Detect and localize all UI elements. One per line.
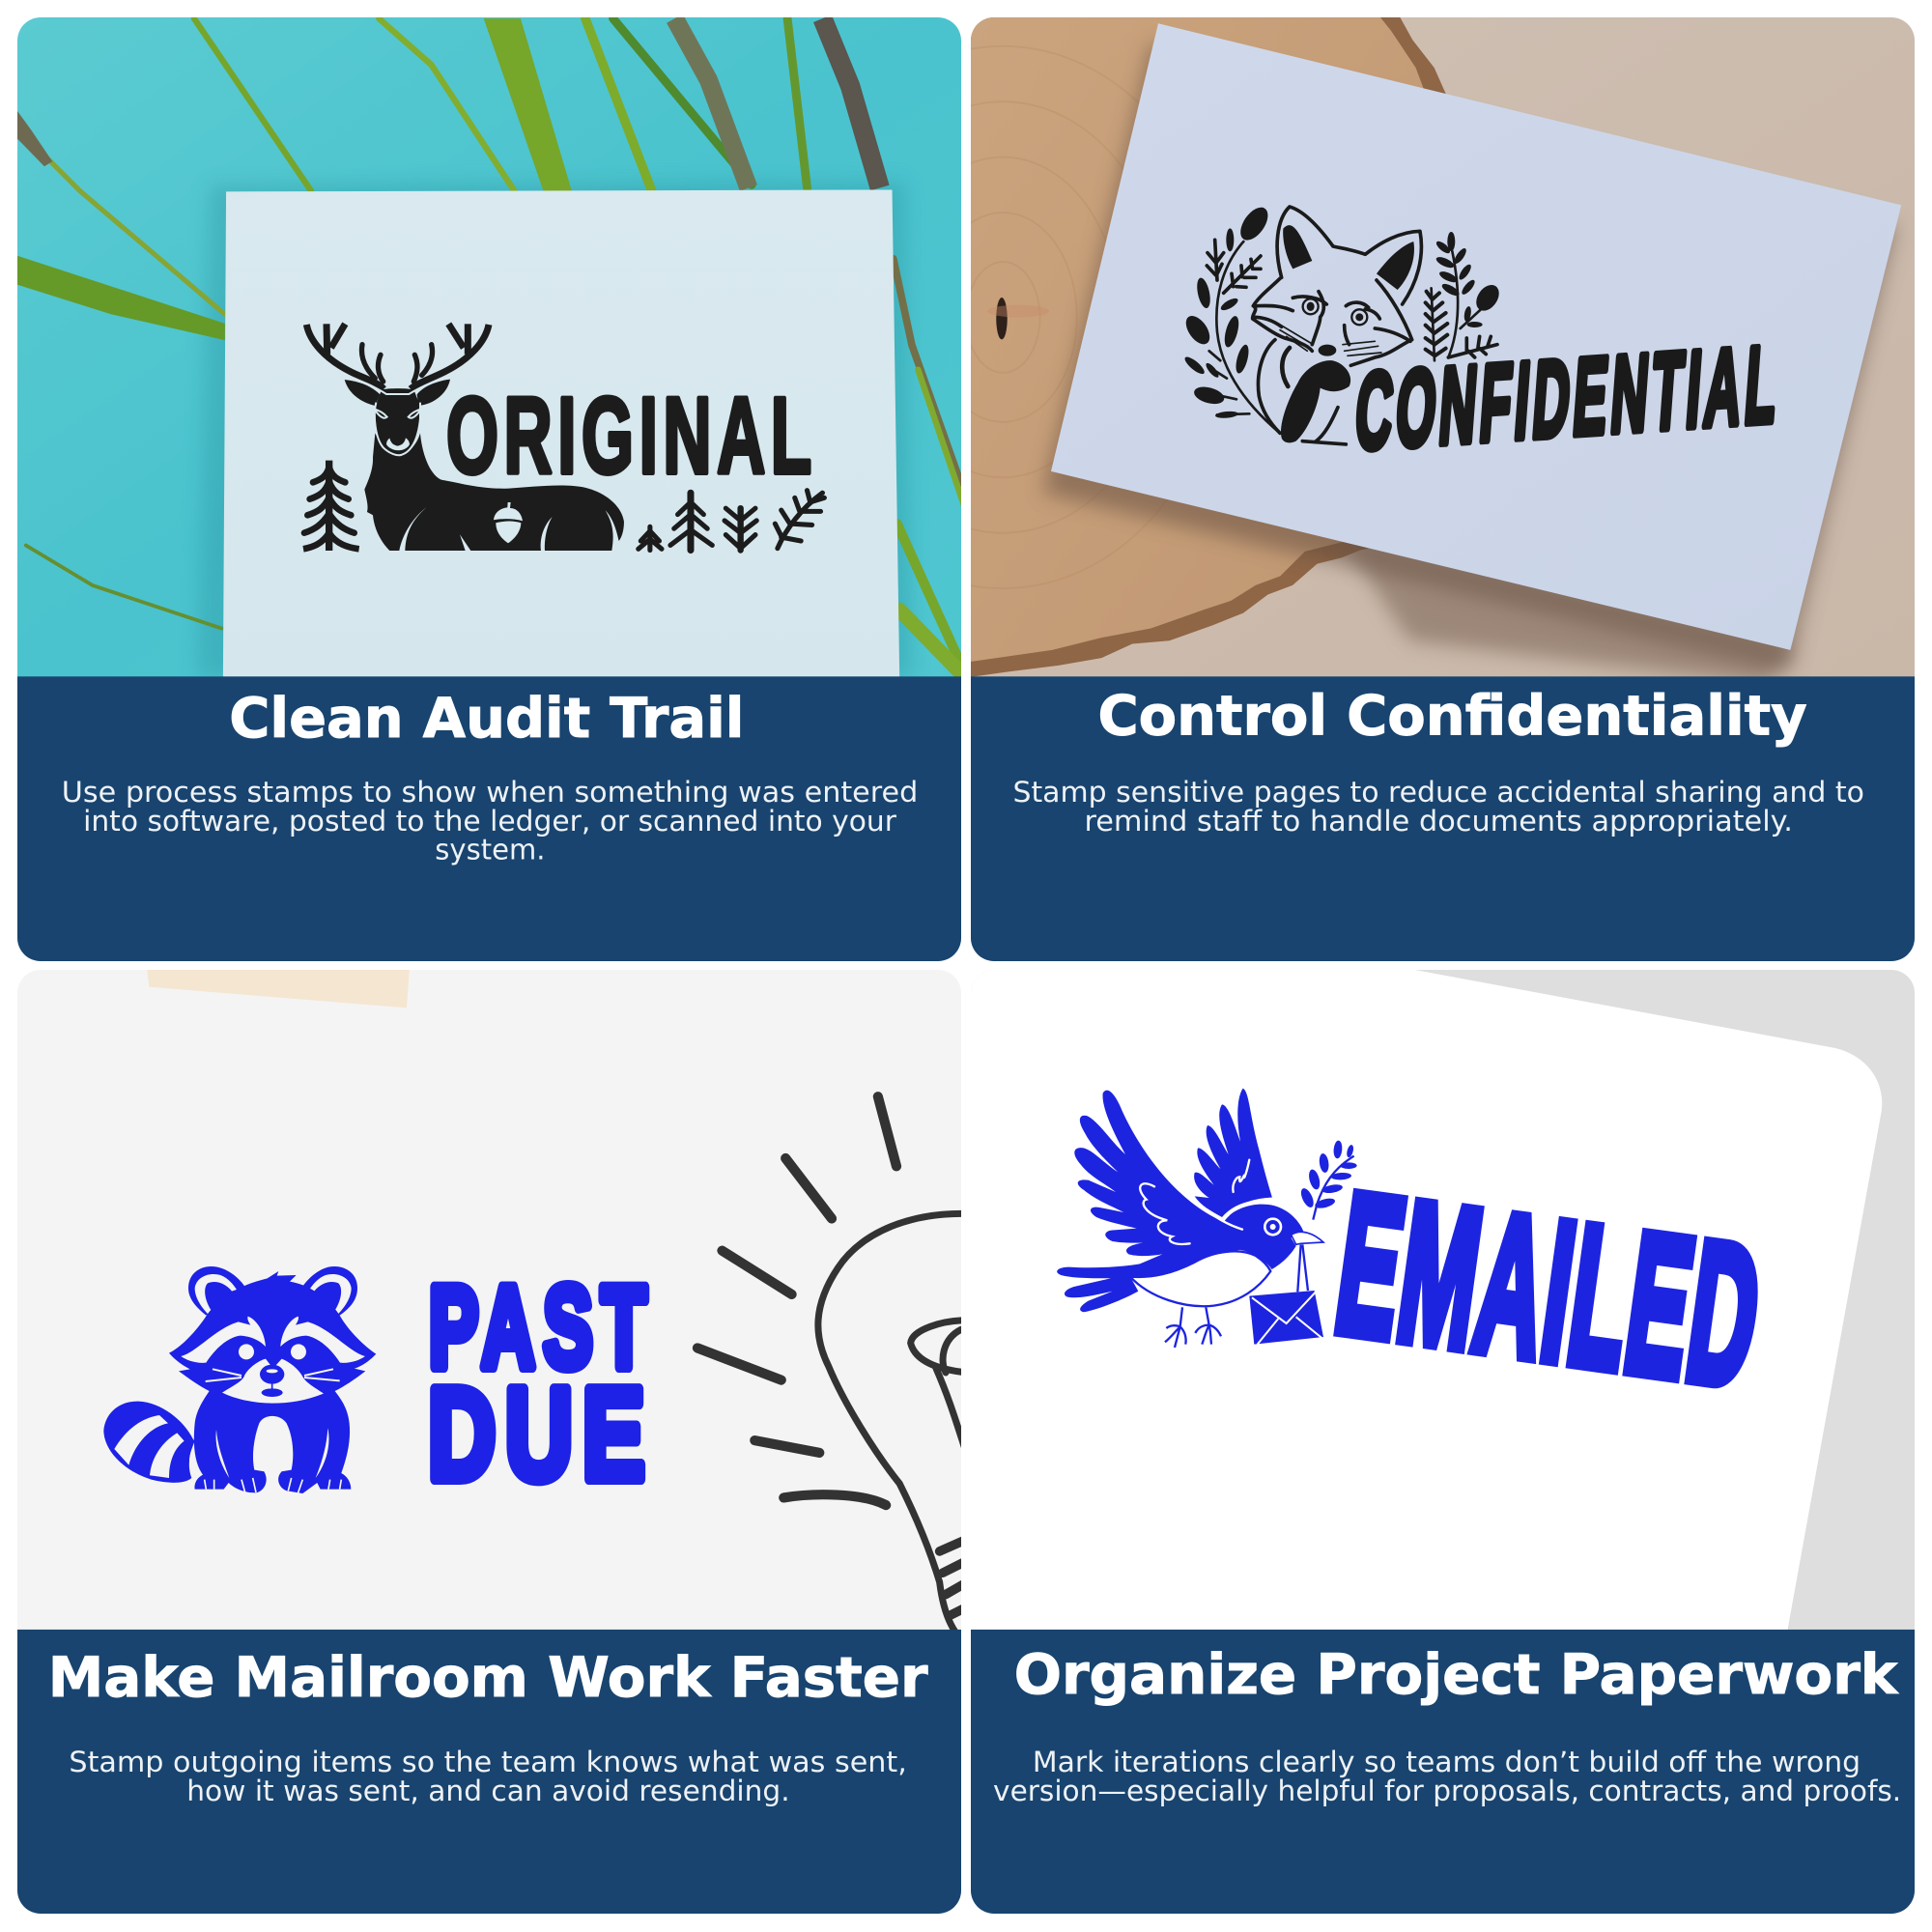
body text: Use process stamps to show when something was entered xyxy=(62,776,918,809)
caption: clean audit trail xyxy=(17,676,961,961)
right plants xyxy=(1426,251,1497,360)
heading: Make Mailroom Work Faster xyxy=(48,1645,928,1710)
body text: Stamp outgoing items so the team knows what was sent, xyxy=(69,1746,907,1778)
icon: small trees and sprigs xyxy=(639,491,824,551)
panel: make mailroom work faster xyxy=(0,966,985,1932)
caption bar xyxy=(966,676,1932,984)
body text xyxy=(993,1746,1901,1807)
icon: bird carrying envelope stamp xyxy=(1057,1089,1357,1348)
icon: fox with leaves stamp xyxy=(1181,203,1504,444)
body text: system. xyxy=(435,834,545,867)
photo: teal background with grass and white card xyxy=(0,0,966,678)
heading: Control Confidentiality xyxy=(1097,683,1807,748)
left branch xyxy=(1207,240,1280,433)
body text xyxy=(62,776,918,867)
body text: how it was sent, and can avoid resending. xyxy=(186,1775,790,1807)
caption: make mailroom work faster xyxy=(0,1630,985,1932)
body text: Stamp sensitive pages to reduce accidental sharing and to xyxy=(1012,776,1864,809)
icon: deer stamp xyxy=(303,324,624,551)
panel: control confidentiality xyxy=(971,17,1915,961)
fox ears and face lines xyxy=(1253,207,1421,444)
stamp word: DUE: DUE xyxy=(428,1361,645,1507)
heading: Clean Audit Trail xyxy=(229,686,744,751)
stamp word: PAST: PAST xyxy=(429,1264,646,1392)
caption: control confidentiality xyxy=(966,676,1932,984)
heading: Organize Project Paperwork xyxy=(1014,1642,1899,1707)
panel: organize project paperwork xyxy=(966,966,1932,1932)
body text xyxy=(1012,776,1864,838)
caption bar xyxy=(966,1630,1932,1932)
stamp word: ORIGINAL: ORIGINAL xyxy=(446,376,811,497)
photo: white wall, tape and light bulb sketch xyxy=(0,966,967,1632)
caption bar xyxy=(17,676,961,961)
icon: raccoon stamp xyxy=(103,1266,376,1493)
photo: wood slice, wall and tilted card xyxy=(971,17,1915,676)
body text: remind staff to handle documents appropriately. xyxy=(1084,805,1793,838)
caption: organize project paperwork xyxy=(966,1630,1932,1932)
body text xyxy=(69,1746,907,1807)
stamp word: CONFIDENTIAL: CONFIDENTIAL xyxy=(1351,323,1781,472)
photo: white card on grey background xyxy=(1416,970,1915,1630)
body text: into software, posted to the ledger, or scanned into your xyxy=(83,805,897,838)
caption bar xyxy=(0,1630,985,1932)
stamp word: EMAILED: EMAILED xyxy=(1325,1152,1772,1428)
body text: version—especially helpful for proposals, contracts, and proofs. xyxy=(993,1775,1901,1807)
body text: Mark iterations clearly so teams don’t build off the wrong xyxy=(1033,1746,1861,1778)
panel: clean audit trail xyxy=(0,0,985,984)
